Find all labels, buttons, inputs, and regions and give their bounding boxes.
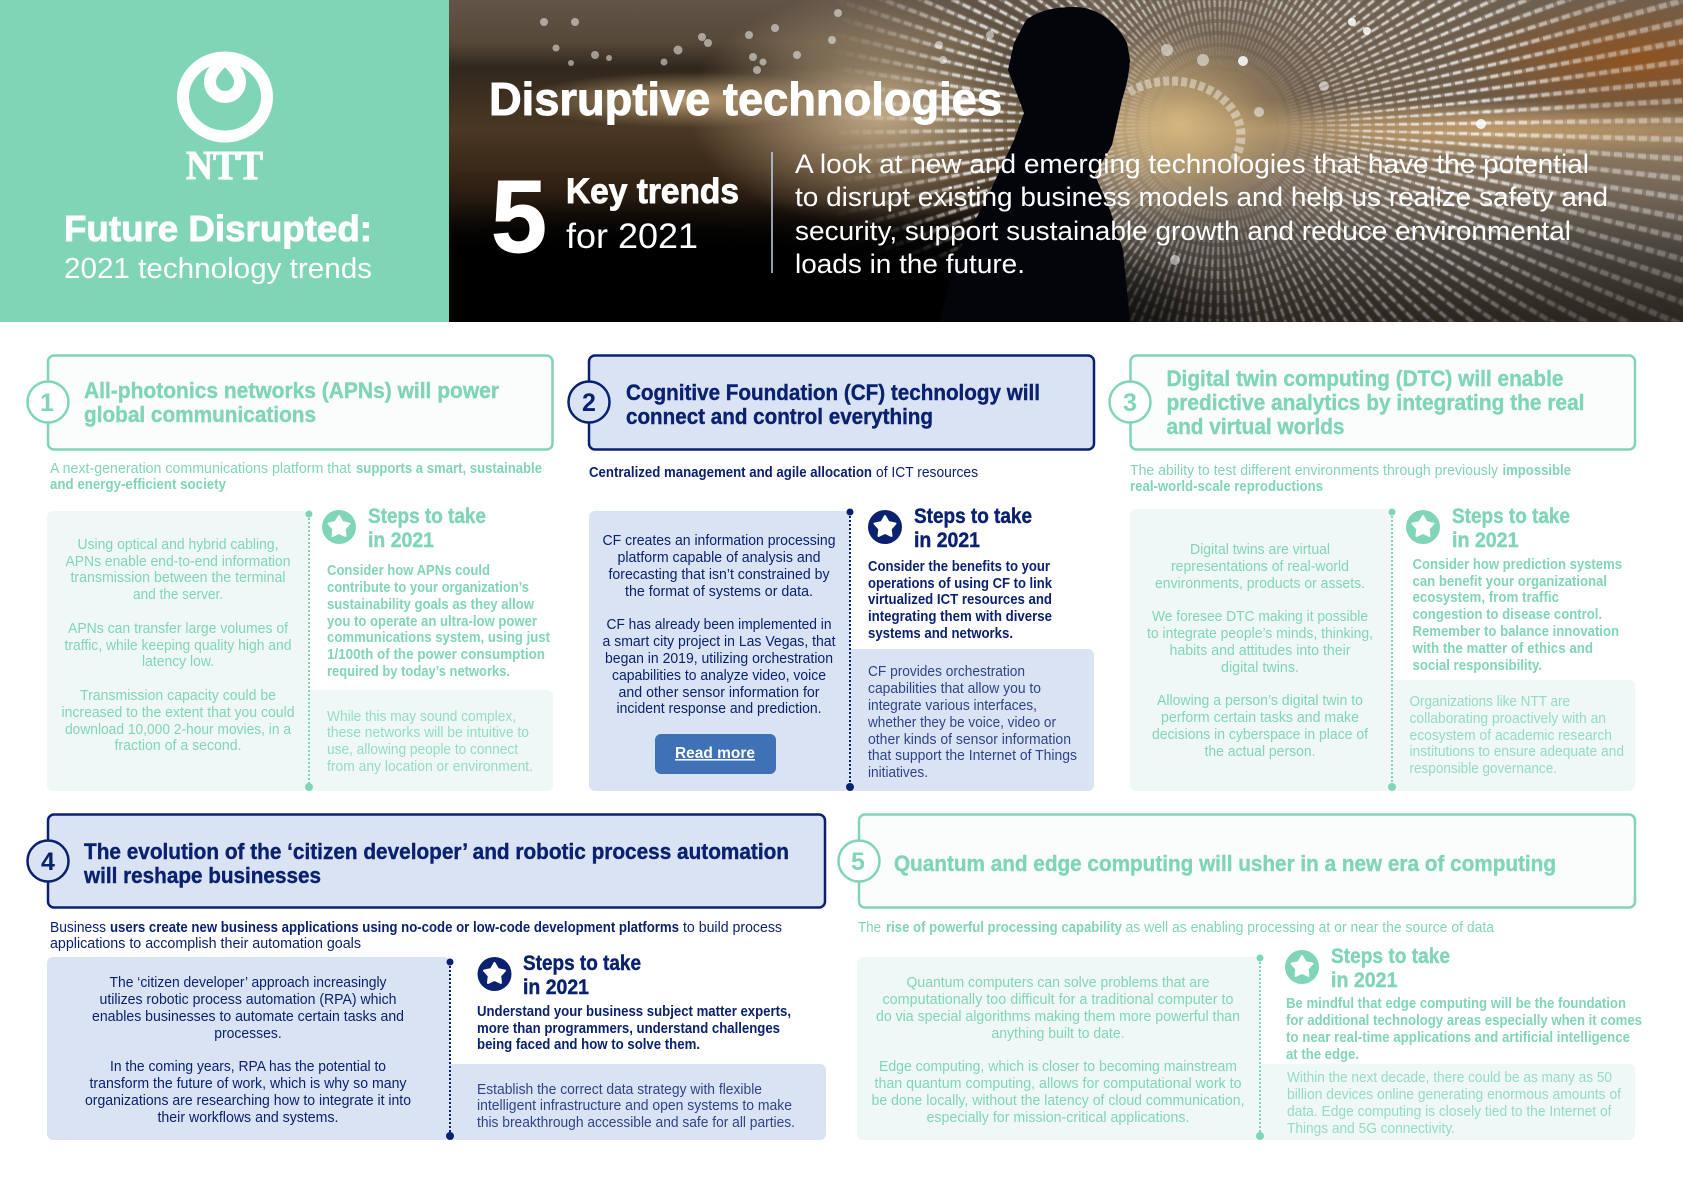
steps text 1 [327,563,550,680]
steps text 5: for additional technology areas especially when it comes [1286,1013,1642,1029]
body card 3: representations of real-world [1171,559,1349,575]
steps text 5: to near real-time applications and artificial intelligence [1286,1030,1630,1046]
heading box 2 [568,356,1094,450]
intro text 3: real-world-scale reproductions [1130,479,1323,495]
intro text 2: of ICT resources [876,465,978,481]
steps text 3: Consider how prediction systems [1412,557,1622,573]
steps heading 4 [523,952,641,999]
steps heading 2: Steps to take [914,505,1032,528]
icon: NTT logo [183,58,267,188]
steps text 1: sustainability goals as they allow [327,597,535,613]
body card 2: began in 2019, utilizing orchestration [605,651,833,667]
intro text 3 [1130,463,1571,495]
body card 2: platform capable of analysis and [618,550,820,566]
note card 1: use, allowing people to connect [327,742,518,758]
steps text 2: operations of using CF to link [868,576,1053,592]
note card 3: ecosystem of academic research [1410,728,1612,744]
big number and key trends: 5 [491,159,547,274]
steps text 5: at the edge. [1286,1047,1359,1063]
intro text 5: The [858,920,881,936]
panel: trend 1 all-photonics networks [28,356,553,791]
intro text 4: to build process [683,920,782,936]
steps text 1: Consider how APNs could [327,563,490,579]
steps heading 1: Steps to take [368,505,486,528]
big number and key trends: for 2021 [566,217,698,256]
heading box 2: 2 [582,389,596,417]
big number and key trends: Key trends [566,172,739,211]
hero description: to disrupt existing business models and help us realize safety and [795,182,1608,212]
steps heading 1 [368,505,486,552]
heading box 5 [838,814,1635,908]
note card 5: data. Edge computing is closely tied to the Internet of [1287,1104,1612,1120]
body card 2: CF has already been implemented in [606,617,832,633]
note card 4: this breakthrough accessible and safe for all parties. [477,1115,795,1131]
panel: trend 4 citizen developer [28,814,826,1140]
steps text 1: communications system, using just [327,630,550,646]
steps text 2: integrating them with diverse [868,609,1052,625]
dotted divider 1 [305,510,313,791]
steps text 3: Remember to balance innovation [1412,624,1619,640]
body card 4: processes. [214,1026,282,1042]
heading box 2: Cognitive Foundation (CF) technology will [626,380,1040,405]
body card 4 [47,957,450,1140]
body card 4: utilizes robotic process automation (RPA) which [100,992,396,1008]
icon: star badge 1 [322,510,356,544]
body card 1: and the server. [133,587,223,603]
body card 4: organizations are researching how to integrate it into [85,1093,411,1109]
steps text 2: virtualized ICT resources and [868,592,1052,608]
steps text 3: congestion to disease control. [1412,607,1602,623]
body card 3: Allowing a person’s digital twin to [1157,693,1363,709]
intro text 4: users create new business applications using no-code or low-code development platforms [110,920,679,936]
heading box 3: and virtual worlds [1166,414,1344,439]
body card 1: latency low. [142,654,214,670]
steps text 1: 1/100th of the power consumption [327,647,545,663]
body card 2 [589,511,850,791]
heading box 1: All-photonics networks (APNs) will power [84,378,499,403]
hero heading: Disruptive technologies [489,73,1002,125]
hero description: loads in the future. [795,249,1025,279]
body card 3: Digital twins are virtual [1190,542,1330,558]
steps text 3: social responsibility. [1412,658,1542,674]
heading box 4 [28,814,825,908]
body card 4: their workflows and systems. [158,1110,338,1126]
intro text 5: as well as enabling processing at or near the source of data [1126,920,1495,936]
intro text 3: impossible [1502,463,1571,479]
body card 3: to integrate people’s minds, thinking, [1147,626,1373,642]
panel: trend 2 cognitive foundation [568,356,1094,791]
steps heading 3 [1452,505,1570,552]
body card 1: APNs enable end-to-end information [66,554,290,570]
note card 5: Within the next decade, there could be as many as 50 [1287,1070,1612,1086]
body card 1: increased to the extent that you could [62,705,294,721]
body card 1: transmission between the terminal [70,570,286,586]
intro text 5 [858,920,1495,936]
icon: NTT logo: NTT [186,142,263,188]
body card 3: digital twins. [1221,660,1299,676]
body card 3: We foresee DTC making it possible [1152,609,1368,625]
big number and key trends [491,159,739,274]
note card 5: Things and 5G connectivity. [1287,1121,1455,1137]
body card 5: anything built to date. [992,1026,1124,1042]
steps text 4: more than programmers, understand challenges [477,1021,780,1037]
intro text 3: The ability to test different environments through previously [1130,463,1499,479]
note card 1: these networks will be intuitive to [327,725,529,741]
note card 4 [450,1064,826,1140]
steps text 2: Consider the benefits to your [868,559,1050,575]
body card 3: decisions in cyberspace in place of [1152,727,1369,743]
steps heading 4: in 2021 [523,976,589,999]
panel title: 2021 technology trends [64,253,372,285]
panel title [64,208,372,285]
steps text 2: systems and networks. [868,626,1013,642]
body card 1: download 10,000 2-hour movies, in a [65,722,292,738]
note card 5 [1260,1064,1635,1140]
note card 1: from any location or environment. [327,759,533,775]
body card 1: fraction of a second. [114,738,242,754]
steps text 1: you to operate an ultra-low power [327,614,537,630]
body card 5: Edge computing, which is closer to becoming mainstream [879,1059,1237,1075]
steps text 5 [1286,996,1642,1063]
note card 4: intelligent infrastructure and open systems to make [477,1098,792,1114]
intro text 2: Centralized management and agile allocation [589,465,872,481]
heading box 1: 1 [40,389,54,417]
steps heading 5 [1331,945,1450,992]
hero description: security, support sustainable growth and reduce environmental [795,216,1571,246]
steps text 3: can benefit your organizational [1412,574,1607,590]
note card 2: that support the Internet of Things [868,748,1077,764]
body card 1: traffic, while keeping quality high and [64,638,292,654]
hero description [795,149,1608,279]
intro text 1 [50,461,542,493]
note card 5: billion devices online generating enormous amounts of [1287,1087,1622,1103]
note card 2: initiatives. [868,765,928,781]
body card 4: In the coming years, RPA has the potential to [110,1059,386,1075]
panel: trend 5 quantum and edge computing [838,814,1642,1140]
panel title: Future Disrupted: [64,208,372,249]
note card 2: other kinds of sensor information [868,732,1071,748]
intro text 1: A next-generation communications platform that [50,461,351,477]
heading box 3: 3 [1123,389,1137,417]
heading box 5: Quantum and edge computing will usher in a new era of computing [894,851,1556,876]
steps text 3: ecosystem, from traffic [1412,590,1559,606]
body card 1: Transmission capacity could be [80,688,276,704]
body card 3: environments, products or assets. [1155,576,1365,592]
body card 3 [1130,509,1392,791]
intro text 5: rise of powerful processing capability [886,920,1122,936]
icon: star badge 5 [1285,950,1319,984]
note card 1 [309,690,553,791]
icon: star badge 4 [478,957,512,991]
heading box 1: global communications [84,402,316,427]
body card 1: Using optical and hybrid cabling, [78,537,278,553]
steps text 4 [477,1004,791,1053]
note card 3: responsible governance. [1410,761,1557,777]
body card 2: capabilities to analyze video, voice [612,668,826,684]
steps text 3: with the matter of ethics and [1412,641,1593,657]
body card 2: and other sensor information for [618,685,820,701]
steps text 3 [1412,557,1622,674]
heading box 3: predictive analytics by integrating the real [1166,390,1584,415]
heading box 4: The evolution of the ‘citizen developer’ and robotic process automation [84,839,789,864]
steps heading 5: in 2021 [1331,969,1398,992]
body card 4: enables businesses to automate certain tasks and [92,1009,404,1025]
body card 5: than quantum computing, allows for computational work to [874,1076,1242,1092]
note card 3 [1392,680,1635,791]
steps heading 5: Steps to take [1331,945,1450,968]
steps heading 3: in 2021 [1452,529,1519,552]
steps heading 1: in 2021 [368,529,434,552]
note card 2: integrate various interfaces, [868,698,1037,714]
body card 2: forecasting that isn’t constrained by [608,567,830,583]
note card 3: collaborating proactively with an [1410,711,1606,727]
note card 3: institutions to ensure adequate and [1410,744,1624,760]
note card 1: While this may sound complex, [327,709,516,725]
intro text 1: and energy-efficient society [50,477,226,493]
steps text 4: being faced and how to solve them. [477,1037,700,1053]
body card 3: perform certain tasks and make [1161,710,1359,726]
body card 2: CF creates an information processing [602,533,836,549]
intro text 1: supports a smart, sustainable [356,461,542,477]
dotted divider 2 [846,508,854,791]
silhouette of a person and bokeh lights [540,7,1486,322]
dotted divider 3 [1388,508,1396,791]
body card 3: habits and attitudes into their [1170,643,1351,659]
steps text 4: Understand your business subject matter experts, [477,1004,791,1020]
body card 4: The ‘citizen developer’ approach increasingly [110,975,387,991]
left green title panel [0,0,449,322]
steps text 2 [868,559,1053,642]
body card 2: incident response and prediction. [616,701,822,717]
heading box 2: connect and control everything [626,404,933,429]
heading box 3 [1110,356,1635,450]
steps heading 4: Steps to take [523,952,641,975]
heading box 4: 4 [41,848,55,876]
body card 1 [47,511,309,791]
steps text 5: Be mindful that edge computing will be the foundation [1286,996,1626,1012]
body card 5: Quantum computers can solve problems that are [906,975,1210,991]
dotted divider 4 [446,958,454,1140]
note card 3: Organizations like NTT are [1410,694,1570,710]
steps text 1: contribute to your organization’s [327,580,529,596]
dotted divider 5 [1256,954,1264,1140]
panel: trend 3 digital twin computing [1110,356,1635,791]
steps heading 2 [914,505,1032,552]
body card 5 [857,957,1260,1140]
body card 1: APNs can transfer large volumes of [68,621,289,637]
hero description: A look at new and emerging technologies that have the potential [795,149,1589,179]
heading box 3: Digital twin computing (DTC) will enable [1166,366,1564,391]
body card 5: especially for mission-critical applications. [926,1110,1190,1126]
heading box 4: will reshape businesses [83,863,321,888]
icon: star badge 3 [1406,510,1440,544]
heading box 1 [28,356,552,450]
body card 2: the format of systems or data. [625,584,813,600]
note card 2 [850,649,1094,791]
body card 5: be done locally, without the latency of cloud communication, [872,1093,1244,1109]
note card 2: CF provides orchestration [868,664,1025,680]
intro text 4: applications to accomplish their automation goals [50,936,361,952]
body card 2: a smart city project in Las Vegas, that [602,634,836,650]
steps text 1: required by today’s networks. [327,664,510,680]
heading box 5: 5 [851,848,865,876]
note card 2: whether they be voice, video or [867,715,1056,731]
icon: star badge 2 [868,510,902,544]
body card 4: transform the future of work, which is why so many [90,1076,407,1092]
body card 5: computationally too difficult for a traditional computer to [882,992,1234,1008]
steps heading 2: in 2021 [914,529,980,552]
intro text 4 [50,920,782,952]
body card 5: do via special algorithms making them more powerful than [876,1009,1240,1025]
intro text 4: Business [50,920,106,936]
button: read more: Read more [675,745,755,762]
note card 2: capabilities that allow you to [868,681,1041,697]
button: read more [655,734,776,774]
steps heading 3: Steps to take [1452,505,1570,528]
note card 4: Establish the correct data strategy with flexible [477,1082,762,1098]
body card 3: the actual person. [1204,744,1316,760]
hero photo background [449,0,1683,322]
